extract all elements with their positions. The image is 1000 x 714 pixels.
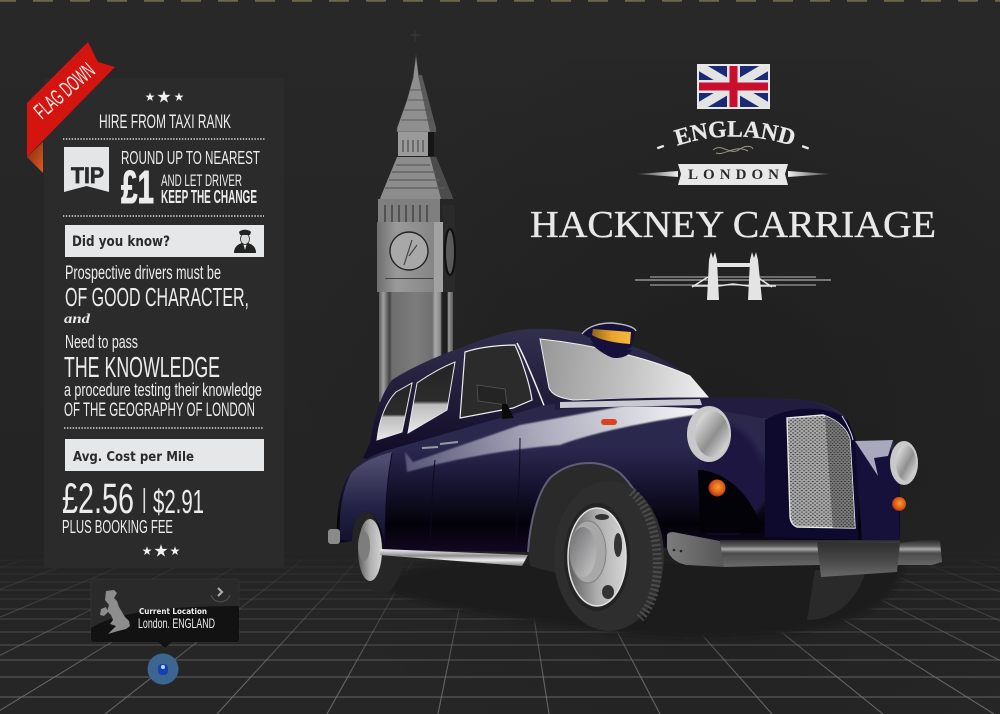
did you know bar: Did you know? — [72, 234, 170, 250]
location tooltip: London. ENGLAND — [138, 615, 215, 631]
tower belfry — [398, 132, 428, 156]
big ben tower — [377, 30, 455, 402]
good character text: Need to pass — [65, 332, 138, 352]
stars top: ★ — [174, 90, 184, 104]
rear bumper — [328, 529, 340, 544]
car shadow on floor — [385, 560, 905, 638]
london banner: LONDON — [688, 167, 779, 183]
cost figures: £2.56 — [62, 475, 134, 523]
england london crest — [638, 121, 828, 185]
stars bottom: ★ — [153, 542, 169, 562]
ribbon: flag down: FLAG DOWN — [29, 58, 100, 124]
tower roof — [380, 157, 453, 199]
avg cost bar — [65, 439, 264, 471]
tower shaft — [379, 292, 453, 402]
tip text: AND LET DRIVER — [161, 171, 242, 190]
right headlamp — [890, 441, 918, 485]
flag: union jack — [697, 64, 770, 109]
body — [337, 398, 900, 552]
good character text: Prospective drivers must be — [65, 263, 221, 284]
front wheel arch — [528, 463, 662, 590]
roof and cabin — [363, 329, 708, 470]
windscreen — [540, 339, 708, 400]
good character text: THE KNOWLEDGE — [64, 352, 220, 384]
title: HACKNEY CARRIAGE — [530, 204, 936, 246]
icon: arrow button — [211, 588, 230, 602]
london banner — [637, 164, 830, 185]
front wheel — [554, 481, 664, 631]
flourish — [713, 146, 753, 153]
tower clock face — [390, 229, 455, 275]
icon: tower bridge — [635, 252, 831, 300]
front right tyre — [807, 570, 866, 620]
stars bottom — [142, 542, 180, 562]
indicator side — [601, 419, 617, 425]
avg cost bar: Avg. Cost per Mile — [73, 449, 194, 465]
cost figures: PLUS BOOKING FEE — [62, 517, 173, 537]
front door window — [460, 345, 532, 418]
hood top band — [555, 398, 842, 418]
tip badge: TIP — [71, 163, 104, 188]
good character text: OF GOOD CHARACTER, — [65, 282, 249, 312]
black cab — [328, 323, 942, 631]
stars bottom: ★ — [170, 544, 180, 558]
top dashed road stripe — [0, 0, 1000, 2]
left headlamp — [687, 406, 731, 462]
front navy panel — [765, 409, 858, 540]
good character text: and — [64, 312, 91, 327]
tip text: ROUND UP TO NEAREST — [121, 148, 260, 168]
tip badge — [64, 147, 109, 192]
rear quarter window — [377, 383, 412, 440]
good character text: OF THE GEOGRAPHY OF LONDON — [64, 400, 255, 421]
tip text — [121, 148, 260, 213]
body shine — [405, 400, 708, 472]
rear door window — [408, 362, 455, 433]
tower clock section — [378, 199, 440, 223]
stars bottom: ★ — [142, 544, 152, 558]
rear wing highlight — [340, 452, 392, 545]
icon: uk map — [100, 590, 130, 634]
england london crest: ENGLAND — [673, 121, 794, 146]
front bumper — [667, 532, 942, 577]
tower spire — [397, 55, 436, 132]
panel: flag down facts — [27, 42, 284, 568]
running board — [380, 549, 528, 566]
taxi roof light — [582, 323, 636, 350]
location tooltip: Current Location — [139, 607, 207, 616]
rear wheel — [358, 506, 404, 594]
location tooltip — [91, 579, 239, 648]
indicators — [708, 480, 906, 511]
good character text — [64, 263, 262, 421]
location marker — [148, 654, 178, 684]
cost figures: $2.91 — [153, 483, 204, 520]
right wing — [855, 440, 900, 541]
good character text: a procedure testing their knowledge — [64, 380, 262, 400]
fender glow — [700, 420, 767, 533]
tip text: £1 — [121, 161, 154, 213]
floor grid — [0, 553, 1000, 714]
cost figures — [62, 475, 204, 537]
stars top — [145, 88, 184, 108]
grille — [787, 415, 855, 530]
ribbon: flag down — [27, 42, 115, 173]
icon: taxi driver — [234, 230, 256, 253]
stars top: ★ — [145, 90, 155, 104]
heading: hire from taxi rank: HIRE FROM TAXI RANK — [99, 112, 231, 133]
stars top: ★ — [156, 88, 172, 108]
body details — [385, 438, 520, 552]
wing mirror — [477, 385, 514, 419]
tip text: KEEP THE CHANGE — [161, 187, 257, 207]
did you know bar — [65, 225, 264, 257]
